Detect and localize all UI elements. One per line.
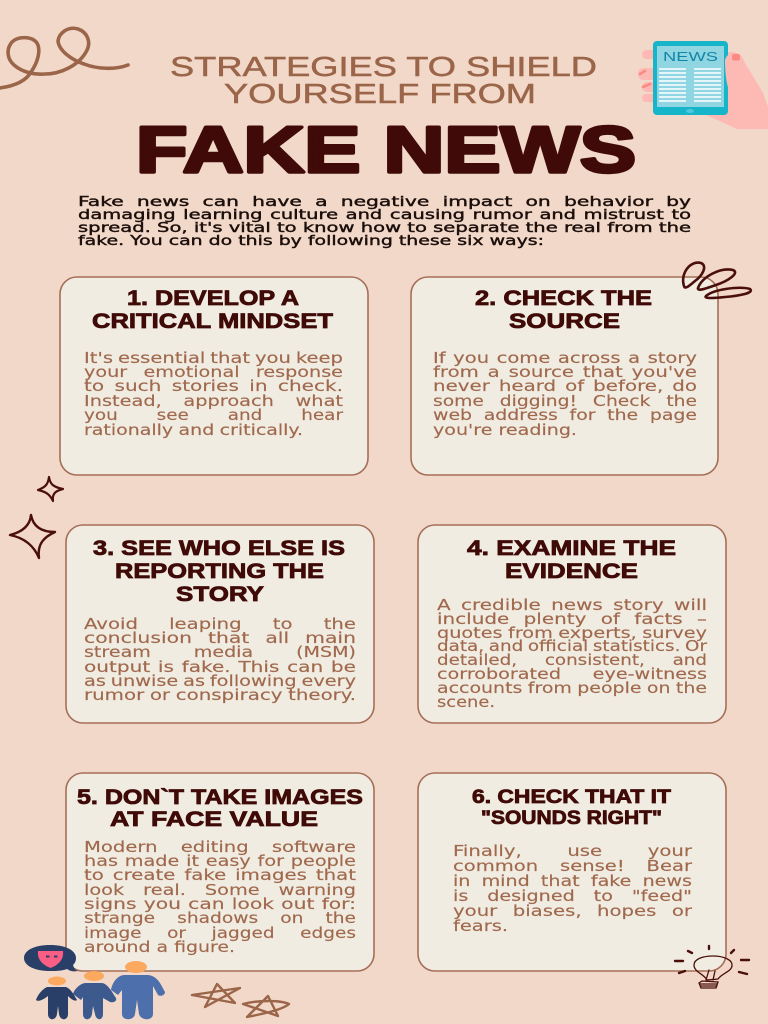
body 3: rumor or conspiracy theory. xyxy=(84,686,356,704)
body 4: detailed, consistent, and xyxy=(437,651,707,669)
body 2 xyxy=(433,349,697,439)
heading 3: STORY xyxy=(176,582,264,606)
body 2: never heard of before, do xyxy=(433,377,697,395)
body 5: look real. Some warning xyxy=(84,881,356,899)
panel: 5 don't take images at face value xyxy=(66,773,374,971)
icon: hand holding tablet with news: NEWS xyxy=(663,49,718,64)
heading 4: EVIDENCE xyxy=(505,559,638,583)
body 1: rationally and critically. xyxy=(84,421,303,439)
body 4 xyxy=(437,596,708,711)
body 4: scene. xyxy=(437,693,495,711)
tall person xyxy=(111,961,165,1019)
heading 1 xyxy=(92,286,333,333)
icon: hand-drawn stars xyxy=(192,984,289,1017)
body 6: common sense! Bear xyxy=(453,857,693,875)
body 3: stream media (MSM) xyxy=(84,643,356,661)
heading 5: 5. DON`T TAKE IMAGES xyxy=(77,785,363,809)
heading 2 xyxy=(475,286,652,333)
heading 6: "SOUNDS RIGHT" xyxy=(481,808,662,829)
body 1: your emotional response xyxy=(84,363,343,381)
body 5: around a figure. xyxy=(84,938,235,956)
short person xyxy=(36,976,77,1019)
speech bubble xyxy=(24,945,78,971)
body 2: If you come across a story xyxy=(433,349,697,367)
body 3 xyxy=(84,615,356,704)
middle person xyxy=(73,971,116,1019)
panel: 3 see who else is reporting xyxy=(66,525,374,723)
body 3: as unwise as following every xyxy=(84,672,356,690)
body 2: some digging! Check the xyxy=(433,392,697,410)
intro text: damaging learning culture and causing rumor and mistrust to xyxy=(78,207,691,223)
intro text: Fake news can have a negative impact on behavior by xyxy=(78,194,691,210)
body 2: from a source that you've xyxy=(433,363,697,381)
intro text: fake. You can do this by following these six ways: xyxy=(78,233,544,249)
body 5: image or jagged edges xyxy=(84,924,356,942)
body 4: include plenty of facts – xyxy=(437,610,707,628)
panel: 4 examine the evidence xyxy=(418,525,726,723)
icon: light bulb xyxy=(675,946,749,988)
body 6: Finally, use your xyxy=(453,842,693,860)
body 4: accounts from people on the xyxy=(437,679,707,697)
heading 1: 1. DEVELOP A xyxy=(127,286,299,310)
body 5: to create fake images that xyxy=(84,866,356,884)
body 6: in mind that fake news xyxy=(453,872,692,890)
body 4: A credible news story will xyxy=(437,596,707,614)
body 5: strange shadows on the xyxy=(84,909,356,927)
body 6: is designed to "feed" xyxy=(453,887,692,905)
heading 5: AT FACE VALUE xyxy=(110,807,318,831)
panel: 6 check that it sounds right xyxy=(418,773,726,971)
heading 2: 2. CHECK THE xyxy=(475,286,652,310)
body 1: Instead, approach what xyxy=(84,392,343,410)
body 3: output is fake. This can be xyxy=(84,658,356,676)
heading 5 xyxy=(77,785,363,831)
icon: small sparkle xyxy=(38,477,63,501)
body 1: It's essential that you keep xyxy=(84,349,343,367)
body 5: signs you can look out for: xyxy=(84,895,356,913)
body 1 xyxy=(84,349,344,439)
panel: 2 check the source xyxy=(411,277,718,475)
body 4: quotes from experts, survey xyxy=(437,624,707,642)
title xyxy=(136,51,636,186)
heading 4 xyxy=(467,536,676,583)
heading 6: 6. CHECK THAT IT xyxy=(472,787,671,808)
body 1: you see and hear xyxy=(84,406,344,424)
body 5: has made it easy for people xyxy=(84,852,356,870)
heading 3 xyxy=(93,536,345,606)
heading 3: REPORTING THE xyxy=(115,559,324,583)
body 3: conclusion that all main xyxy=(84,629,356,647)
icon: people with speech bubble xyxy=(24,945,165,1019)
body 6 xyxy=(453,842,693,935)
body 5: Modern editing software xyxy=(84,838,356,856)
heading 6 xyxy=(472,787,671,829)
body 2: you're reading. xyxy=(433,421,577,439)
icon: swirl doodle xyxy=(0,28,128,88)
body 6: your biases, hopes or xyxy=(453,902,693,920)
panel: 1 develop a critical mindset xyxy=(60,277,368,475)
subtitle line 1: STRATEGIES TO SHIELD xyxy=(170,51,597,82)
body 1: to such stories in check. xyxy=(84,377,343,395)
heading 3: 3. SEE WHO ELSE IS xyxy=(93,536,345,560)
heading 2: SOURCE xyxy=(509,309,620,333)
main headline: FAKE NEWS xyxy=(136,113,636,186)
body 4: corroborated eye-witness xyxy=(437,665,707,683)
heading 1: CRITICAL MINDSET xyxy=(92,309,333,333)
intro text xyxy=(78,194,691,249)
icon: leaf loops doodle xyxy=(683,263,751,298)
subtitle line 2: YOURSELF FROM xyxy=(224,78,536,109)
icon: hand holding tablet with news xyxy=(638,41,768,129)
heading 4: 4. EXAMINE THE xyxy=(467,536,676,560)
body 6: fears. xyxy=(453,917,508,935)
body 5 xyxy=(84,838,356,956)
body 3: Avoid leaping to the xyxy=(84,615,356,633)
icon: large sparkle xyxy=(10,515,55,558)
intro text: spread. So, it's vital to know how to separate the real from the xyxy=(78,220,691,236)
body 4: data, and official statistics. Or xyxy=(437,637,708,655)
body 2: web address for the page xyxy=(433,406,697,424)
